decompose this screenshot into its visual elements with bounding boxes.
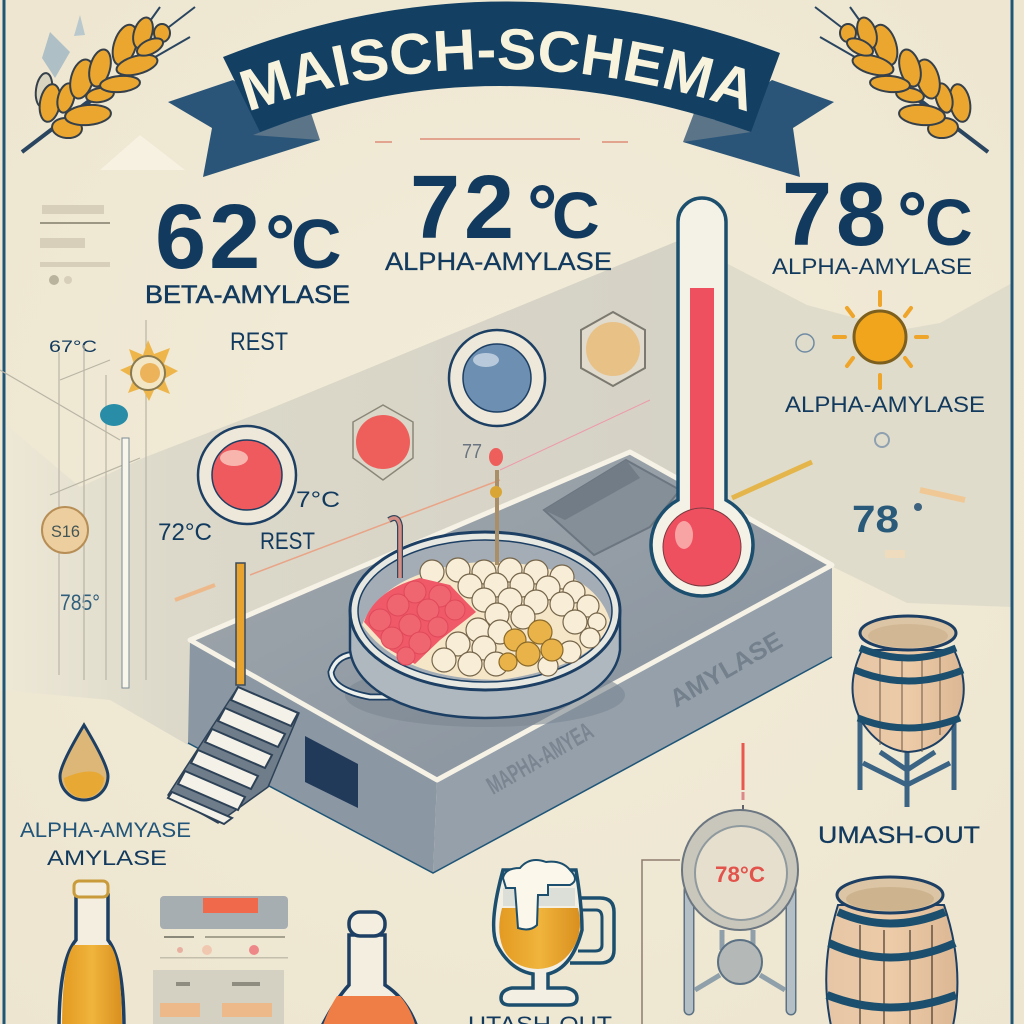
label: 77: 77 [462,441,482,463]
label: small 78 left: 785° [60,590,100,615]
heading: 62°C: ° [265,200,295,285]
icon: wheat right [815,7,988,152]
icon: bottle [59,881,124,1024]
blue gauge [449,330,545,426]
stirrer pipes [389,470,497,578]
red hexagon gauge [353,405,413,480]
icon: flask [320,912,418,1024]
label: rest upper: REST [230,328,288,356]
icon: barrel with stand [852,616,964,807]
malt grains [420,558,606,676]
left probe [100,404,129,688]
heading: 78°C: ° [897,177,927,262]
background wall [0,240,1012,745]
label: alpha-amylase center: ALPHA-AMYLASE [385,248,612,276]
icon: beer mug [494,860,614,1005]
icon: gauge vessel [642,743,798,1024]
heading: 62°C: C [291,205,342,283]
label: umash-out right: UMASH-OUT [818,822,980,849]
faint red dashes [375,139,628,142]
mash pan [331,448,625,727]
icon: small sun [120,340,178,401]
platform side label left: MAPHA-AMYEA [482,717,598,800]
gauge reading: 78°C [715,862,765,887]
heading: 72°C: ° [527,170,557,255]
left guide lines [0,320,146,680]
control panel lower [153,970,284,1024]
heading: 62°C: 62 [155,186,263,288]
orange dashes [175,400,812,600]
label: 72°C lower: 72°C [158,519,212,546]
amber malt [499,620,563,671]
icon: wheat left [22,7,195,152]
heading: 78°C: 78 [782,165,890,265]
icon: barrel foreground [826,877,957,1024]
platform window [305,736,358,808]
heading: 72°C: 72 [410,158,518,258]
red malt [364,578,476,665]
heading: 78°C: C [925,185,973,259]
icon: tan badge [42,507,88,553]
label: small 67°C: 67°C [49,337,97,356]
label: 7°C: 7°C [296,487,340,512]
control panel upper [160,896,288,958]
red gauge [198,426,296,524]
icon: right sun [834,292,927,388]
label: rest lower: REST [260,528,315,555]
platform side label right: AMYLASE [665,626,787,713]
label: alpha-amyase left: ALPHA-AMYASE [20,819,191,842]
title banner [100,2,834,177]
orange post [236,563,245,685]
thermometer [651,198,753,596]
label: amylase left: AMYLASE [47,847,167,870]
icon: amber drop [60,725,108,800]
heading: 72°C: C [552,178,600,252]
title [248,69,748,112]
label: alpha-amylase right: ALPHA-AMYLASE [772,254,972,279]
faint scribbles right [796,334,965,558]
title banner: MAISCH-SCHEMA [240,28,747,112]
staircase [168,687,299,824]
tan hexagon gauge [581,312,645,386]
label: alpha-amylase right lower: ALPHA-AMYLASE [785,392,985,417]
label: beta-amylase: BETA-AMYLASE [145,281,350,309]
faint legend marks [40,205,110,285]
mash platform [188,452,832,873]
label: 78 right: 78 [852,499,899,541]
icon: tan badge: S16 [51,522,80,541]
